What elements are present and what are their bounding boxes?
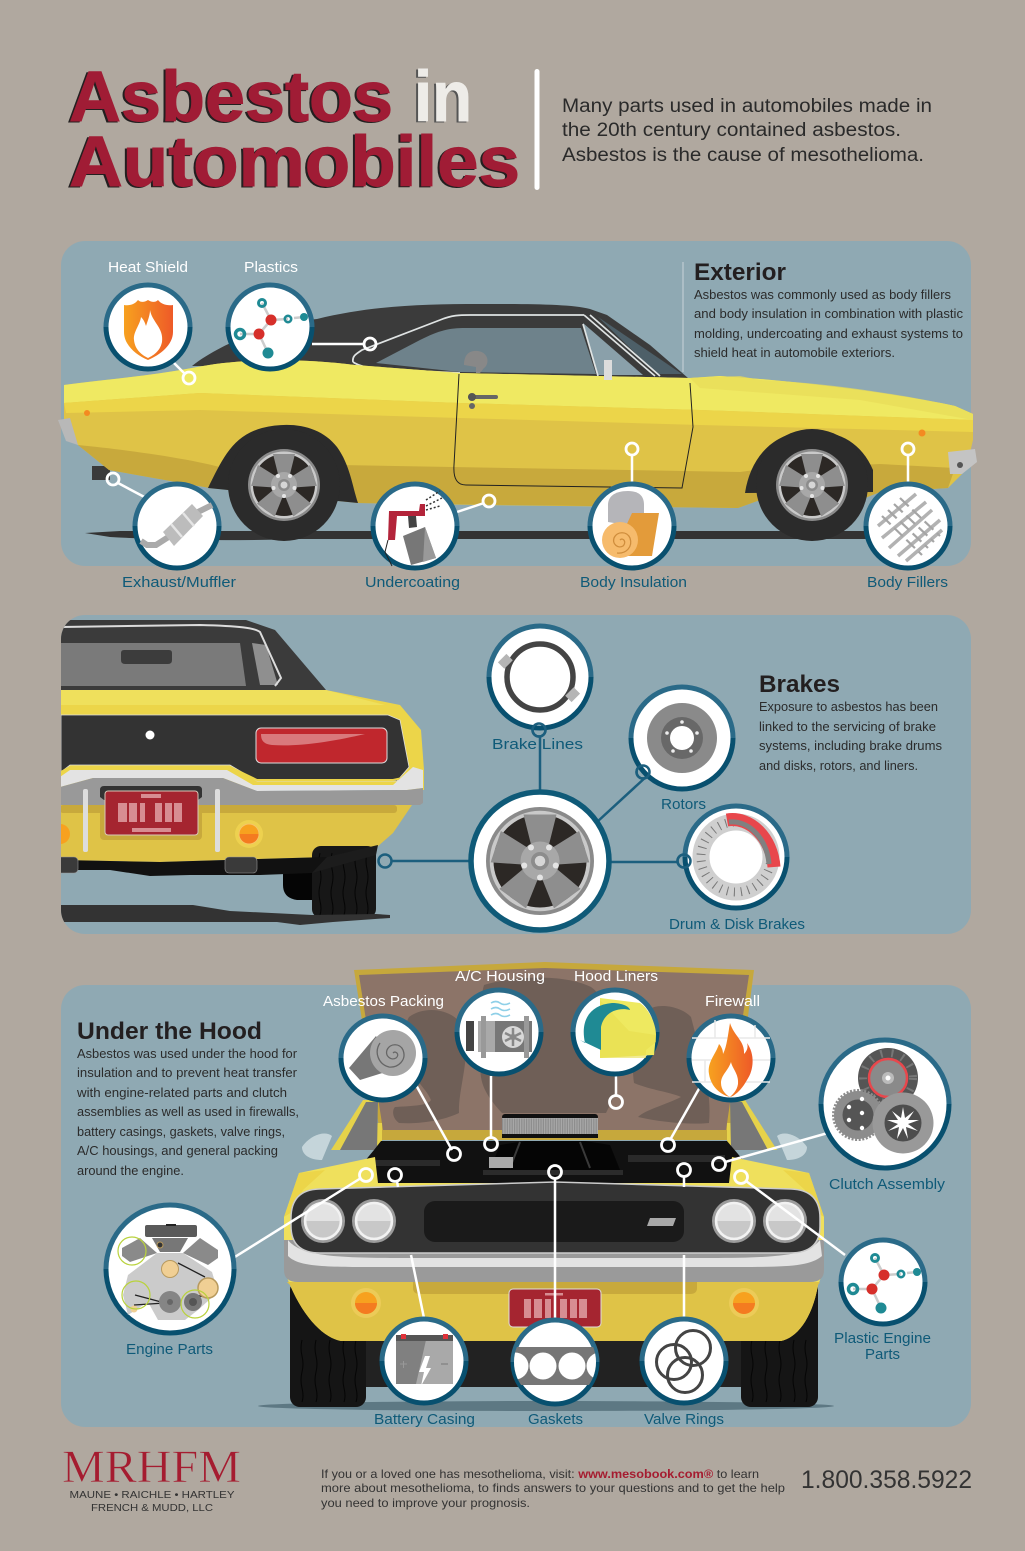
footer logo: MRHFM [62,1441,241,1493]
callout: battery casing [374,1168,475,1428]
callout: a/c housing [455,968,545,1150]
text: brakes: and disks, rotors, and liners. [759,759,918,773]
text: under the hood: assemblies as well as used in firewalls, [77,1105,299,1119]
title: in [414,58,472,137]
callout: body insulation: Body Insulation [580,574,687,591]
heading: exterior: Exterior [694,259,786,286]
callout: body insulation [580,443,687,591]
grille [291,1182,820,1253]
callout: hood liners: Hood Liners [574,968,658,985]
text: under the hood: A/C housings, and general packing [77,1144,278,1158]
footer logo: FRENCH & MUDD, LLC [91,1502,213,1514]
callout: plastic engine parts [734,1170,931,1363]
heading: brakes: Brakes [759,671,840,698]
car shadow [85,531,880,540]
callout: rotors [631,687,733,813]
callout: gaskets [510,1164,600,1424]
callout: body fillers [866,443,950,591]
callout: drum and disk brakes: Drum & Disk Brakes [669,916,805,933]
callout: asbestos packing [323,993,460,1160]
raised hood [354,962,754,1151]
text: exterior: shield heat in automobile exteriors. [694,346,895,360]
callout: heat shield: Heat Shield [108,259,188,276]
footer text [321,1467,785,1510]
callout: body fillers: Body Fillers [867,574,948,591]
text: brakes [759,700,942,773]
intro text [562,96,932,166]
footer logo [62,1441,241,1514]
text: under the hood: Asbestos was used under the hood for [77,1047,297,1061]
title: Automobiles [69,123,520,202]
text: under the hood: around the engine. [77,1164,184,1178]
title: Asbestos [69,58,393,137]
text: brakes: systems, including brake drums [759,739,942,753]
callout: brake lines [489,626,591,753]
callout: plastics [228,259,376,369]
text: brakes: Exposure to asbestos has been [759,700,938,714]
side view car [58,304,977,541]
footer text: If you or a loved one has mesothelioma, visit: www.mesobook.com® to learn [321,1467,759,1481]
callout: hood liners [573,968,658,1108]
panel: exterior [58,241,977,591]
callout: gaskets: Gaskets [528,1411,583,1428]
callout: exhaust muffler: Exhaust/Muffler [122,574,236,591]
phone number: 1.800.358.5922 [801,1466,972,1494]
footer text: you need to improve your prognosis. [321,1496,530,1510]
text: under the hood [76,1047,299,1178]
callout: heat shield [106,259,195,384]
headlights [301,1199,807,1243]
callout: undercoating: Undercoating [365,574,460,591]
text: under the hood: insulation and to prevent heat transfer [77,1066,297,1080]
callout: plastics: Plastics [244,259,298,276]
callout: exhaust muffler [107,473,236,591]
panel: brakes [50,615,971,934]
callout: brake lines: Brake Lines [492,736,583,753]
text: under the hood: with engine-related parts and clutch [76,1086,287,1100]
callout: a/c housing: A/C Housing [455,968,545,985]
text: exterior [694,288,963,360]
callout: valve rings: Valve Rings [644,1411,724,1428]
connector lines [378,724,690,868]
text: brakes: linked to the servicing of brake [759,720,936,734]
callout: firewall: Firewall [705,993,760,1010]
license plate [509,1289,601,1327]
text: exterior: molding, undercoating and exhaust systems to [694,327,963,341]
intro text: the 20th century contained asbestos. [562,120,901,141]
callout: asbestos packing: Asbestos Packing [323,993,444,1010]
callout: wheel [471,792,609,930]
rear view car [50,620,424,925]
callout: battery casing: Battery Casing [374,1411,475,1428]
panel: under the hood [61,985,971,1427]
callout: drum and disk brakes [669,806,805,933]
callout: engine parts: Engine Parts [126,1341,213,1358]
license plate [105,791,198,835]
callout: undercoating [365,484,495,591]
callout: rotors: Rotors [661,796,706,813]
intro text: Many parts used in automobiles made in [562,96,932,117]
footer logo: MAUNE • RAICHLE • HARTLEY [70,1489,234,1501]
title [69,58,520,202]
heading: under the hood: Under the Hood [77,1018,262,1045]
callout: clutch assembly [712,1040,949,1193]
footer text: more about mesothelioma, to finds answers to your questions and to get the help [321,1481,785,1495]
air cleaner [502,1114,598,1138]
text: exterior: Asbestos was commonly used as body fillers [694,288,951,302]
callout: clutch assembly: Clutch Assembly [829,1176,946,1193]
intro text: Asbestos is the cause of mesothelioma. [562,145,924,166]
callout: plastic engine parts: Plastic Engine [834,1330,931,1347]
callout: valve rings [642,1164,726,1428]
callout: firewall [662,993,773,1152]
text: under the hood: battery casings, gaskets, valve rings, [77,1125,285,1139]
front view car [258,962,834,1411]
callout: plastic engine parts: Parts [865,1346,900,1363]
callout: engine parts [106,1168,372,1358]
text: exterior: and body insulation in combination with plastic [694,307,963,321]
